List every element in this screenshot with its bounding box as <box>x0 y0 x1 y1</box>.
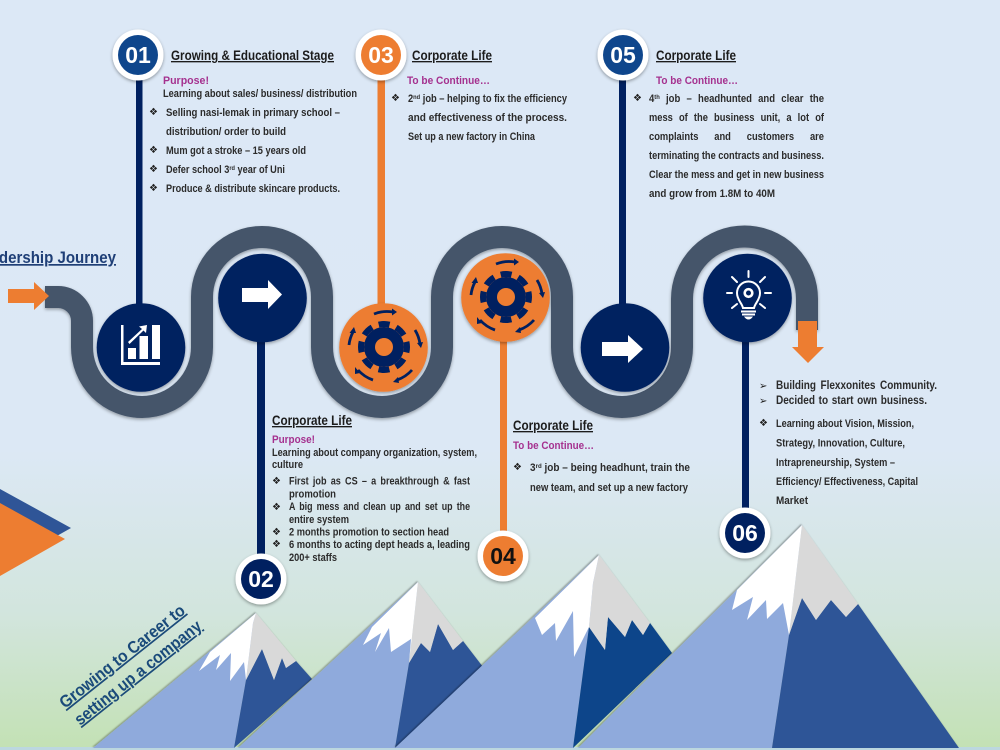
panel 06: Building Flexxonites Community: ❖ <box>759 418 768 429</box>
panel 02: Corporate Life: Purpose! <box>272 434 315 446</box>
rotated caption: Growing to Career to setting up a company: setting up a company <box>71 616 206 729</box>
rotated caption: Growing to Career to setting up a company: Growing to Career to <box>56 601 189 712</box>
winding road <box>45 237 807 407</box>
panel 03: Corporate Life: and effectiveness of the process. <box>408 112 567 124</box>
panel 06: Building Flexxonites Community: Intrapreneurship, System – <box>776 457 895 469</box>
panel 06: Building Flexxonites Community: Market <box>776 495 808 507</box>
connector lines <box>136 75 749 560</box>
panel 06: Building Flexxonites Community <box>759 380 937 507</box>
panel 01: Growing & Educational Stage: ❖ <box>149 145 158 156</box>
panel 06: Building Flexxonites Community: Efficiency/ Effectiveness, Capital <box>776 476 918 488</box>
panel 01: Growing & Educational Stage: Selling nasi-lemak in primary school – <box>166 107 340 119</box>
panel 03: Corporate Life: Set up a new factory in China <box>408 131 535 143</box>
panel 05: Corporate Life: th <box>654 94 660 101</box>
panel 05: Corporate Life: Corporate Life <box>656 48 736 63</box>
panel 01: Growing & Educational Stage: ❖ <box>149 164 158 175</box>
panel 01: Growing & Educational Stage: Growing & Educational Stage <box>171 48 334 63</box>
panel 01: Growing & Educational Stage <box>149 48 357 195</box>
panel 01: Growing & Educational Stage: Purpose! <box>163 75 209 87</box>
panel 05: Corporate Life: terminating the contracts and business. <box>649 150 824 162</box>
panel 04: Corporate Life: rd <box>536 463 542 470</box>
mountain 2 <box>238 582 483 748</box>
icon circle: gear 2 <box>461 253 550 342</box>
panel 04: Corporate Life: 3 <box>530 462 536 474</box>
panel 02: Corporate Life: A big mess and clean up and set up the <box>289 501 470 513</box>
badge 01: 01 <box>125 42 151 68</box>
badge 05 <box>598 30 648 80</box>
panel 01: Growing & Educational Stage: Defer school 3 <box>166 164 239 176</box>
panel 02: Corporate Life: ❖ <box>272 476 281 487</box>
badge 04: 04 <box>490 543 516 569</box>
icon circle: gear 1 <box>339 303 428 392</box>
panel 02: Corporate Life: ❖ <box>272 527 281 538</box>
panel 05: Corporate Life <box>633 48 824 200</box>
panel 01: Growing & Educational Stage: distribution/ order to build <box>166 126 286 138</box>
panel 02: Corporate Life: 6 months to acting dept heads a, leading <box>289 539 470 551</box>
panel 01: Growing & Educational Stage: Mum got a stroke – 15 years old <box>166 145 306 157</box>
badge 03: 03 <box>368 42 394 68</box>
panel 04: Corporate Life: new team, and set up a new factory <box>530 482 688 494</box>
panel 02: Corporate Life <box>272 413 477 564</box>
icon circle: chart <box>97 303 185 392</box>
badge 03 <box>356 30 406 80</box>
panel 03: Corporate Life <box>391 48 567 143</box>
panel 02: Corporate Life: entire system <box>289 514 349 526</box>
panel 05: Corporate Life: mess of the business unit, a lot of <box>649 112 824 124</box>
arrow: start <box>8 282 49 310</box>
panel 03: Corporate Life: 2 <box>408 93 414 105</box>
badge 02 <box>236 554 286 604</box>
panel 02: Corporate Life: First job as CS – a breakthrough & fast <box>289 476 470 488</box>
panel 03: Corporate Life: nd <box>413 94 420 101</box>
panel 05: Corporate Life: 4 <box>649 93 655 105</box>
panel 02: Corporate Life: ❖ <box>272 539 281 550</box>
panel 04: Corporate Life <box>513 418 690 494</box>
mountain 1 <box>93 613 312 748</box>
panel 06: Building Flexxonites Community: ➢ <box>759 396 767 407</box>
badge 04 <box>478 530 528 582</box>
panel 06: Building Flexxonites Community: Strategy, Innovation, Culture, <box>776 438 905 450</box>
panel 01: Growing & Educational Stage: year of Uni <box>235 164 285 176</box>
panel 02: Corporate Life: 2 months promotion to section head <box>289 526 449 538</box>
panel 05: Corporate Life: and grow from 1.8M to 40M <box>649 188 775 200</box>
panel 02: Corporate Life: culture <box>272 459 303 471</box>
panel 02: Corporate Life: promotion <box>289 488 336 500</box>
panel 04: Corporate Life: ❖ <box>513 462 522 473</box>
panel 05: Corporate Life: To be Continue… <box>656 75 738 87</box>
panel 03: Corporate Life: Corporate Life <box>412 48 492 63</box>
arrow: end <box>792 321 824 363</box>
panel 02: Corporate Life: 200+ staffs <box>289 552 337 564</box>
panel 05: Corporate Life: ❖ <box>633 93 642 104</box>
badge 02: 02 <box>248 566 274 592</box>
panel 01: Growing & Educational Stage: Produce & distribute skincare products. <box>166 183 340 195</box>
panel 04: Corporate Life: job – being headhunt, train the <box>542 462 690 474</box>
panel 05: Corporate Life: Clear the mess and get in new business <box>649 169 824 181</box>
panel 06: Building Flexxonites Community: ➢ <box>759 381 767 392</box>
panel 02: Corporate Life: Corporate Life <box>272 413 352 428</box>
panel 01: Growing & Educational Stage: rd <box>229 165 235 172</box>
icon circle: arrow 1 <box>218 254 307 342</box>
mountain 4 <box>578 525 959 748</box>
left decorative triangles <box>0 489 71 576</box>
panel 01: Growing & Educational Stage: ❖ <box>149 107 158 118</box>
icon circle: light bulb <box>703 254 792 342</box>
panel 02: Corporate Life: Learning about company organization, system, <box>272 447 477 459</box>
panel 05: Corporate Life: complaints and customers are <box>649 131 824 143</box>
panel 03: Corporate Life: ❖ <box>391 93 400 104</box>
badge 06: 06 <box>732 520 758 546</box>
panel 03: Corporate Life: To be Continue… <box>407 75 490 87</box>
badge 05: 05 <box>610 42 636 68</box>
panel 06: Building Flexxonites Community: Building Flexxonites Community. <box>776 380 937 392</box>
badge 01 <box>112 30 164 80</box>
panel 01: Growing & Educational Stage: ❖ <box>149 183 158 194</box>
panel 03: Corporate Life: job – helping to fix the efficiency <box>420 93 567 105</box>
icon circle: arrow 2 <box>581 303 669 392</box>
panel 05: Corporate Life: job – headhunted and clear the <box>660 93 824 105</box>
panel 02: Corporate Life: ❖ <box>272 502 281 513</box>
panel 04: Corporate Life: To be Continue… <box>513 440 594 452</box>
panel 06: Building Flexxonites Community: Learning about Vision, Mission, <box>776 418 914 430</box>
mountain 3 <box>395 555 672 748</box>
badge 06 <box>720 508 770 558</box>
panel 06: Building Flexxonites Community: Decided to start own business. <box>776 395 927 407</box>
panel 04: Corporate Life: Corporate Life <box>513 418 593 433</box>
panel 01: Growing & Educational Stage: Learning about sales/ business/ distribution <box>163 88 357 100</box>
